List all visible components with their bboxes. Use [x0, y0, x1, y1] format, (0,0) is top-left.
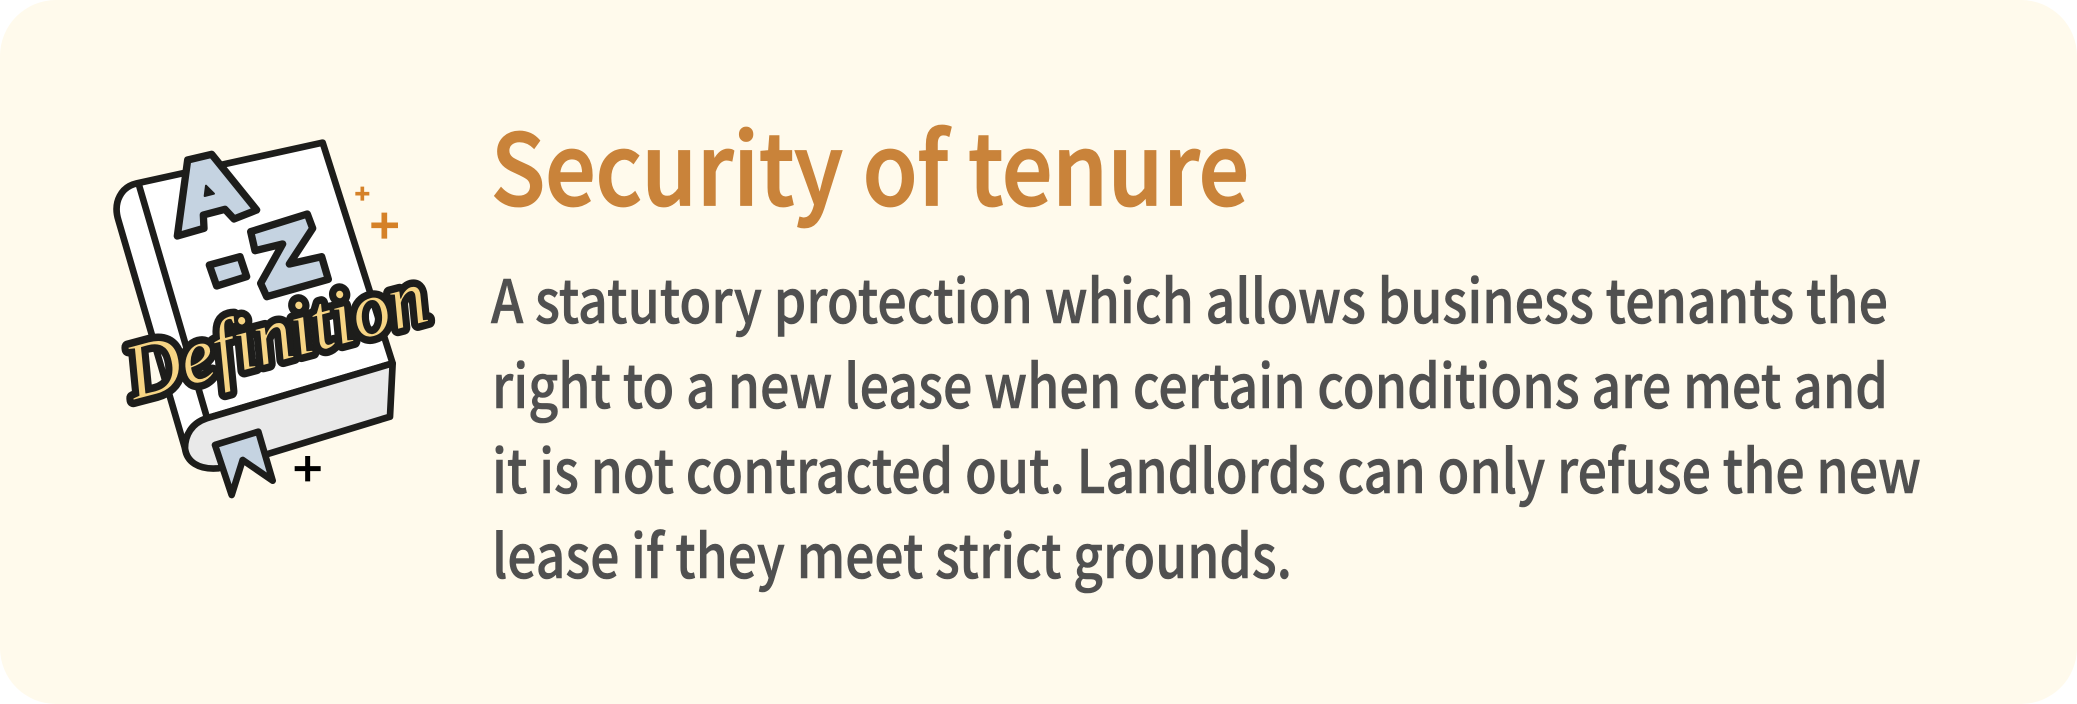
- body line 1: A statutory protection which allows business tenants the: [491, 254, 1888, 341]
- title: Security of tenure: [491, 92, 1249, 234]
- book pages: [185, 363, 393, 469]
- script label outline: Definition: [115, 253, 436, 418]
- sparkle: large orange plus: [371, 213, 398, 239]
- body text: [491, 254, 1921, 596]
- letter A counter: [205, 186, 214, 196]
- letter Z: [251, 214, 328, 297]
- letter A: [177, 154, 257, 236]
- bookmark ribbon: [215, 432, 273, 495]
- hyphen: [209, 257, 247, 286]
- sparkle: small orange plus: [355, 187, 369, 201]
- book spine line: [139, 184, 207, 417]
- script label: Definition: [115, 253, 436, 418]
- sparkle: black plus: [295, 456, 321, 481]
- book cover: [117, 143, 393, 448]
- script label fill: Definition: [115, 253, 436, 418]
- body line 4: lease if they meet strict grounds.: [492, 509, 1292, 596]
- body line 2: right to a new lease when certain conditions are met and: [492, 339, 1888, 426]
- icon: A-Z definition book: [115, 143, 436, 495]
- letter A body: [177, 154, 257, 236]
